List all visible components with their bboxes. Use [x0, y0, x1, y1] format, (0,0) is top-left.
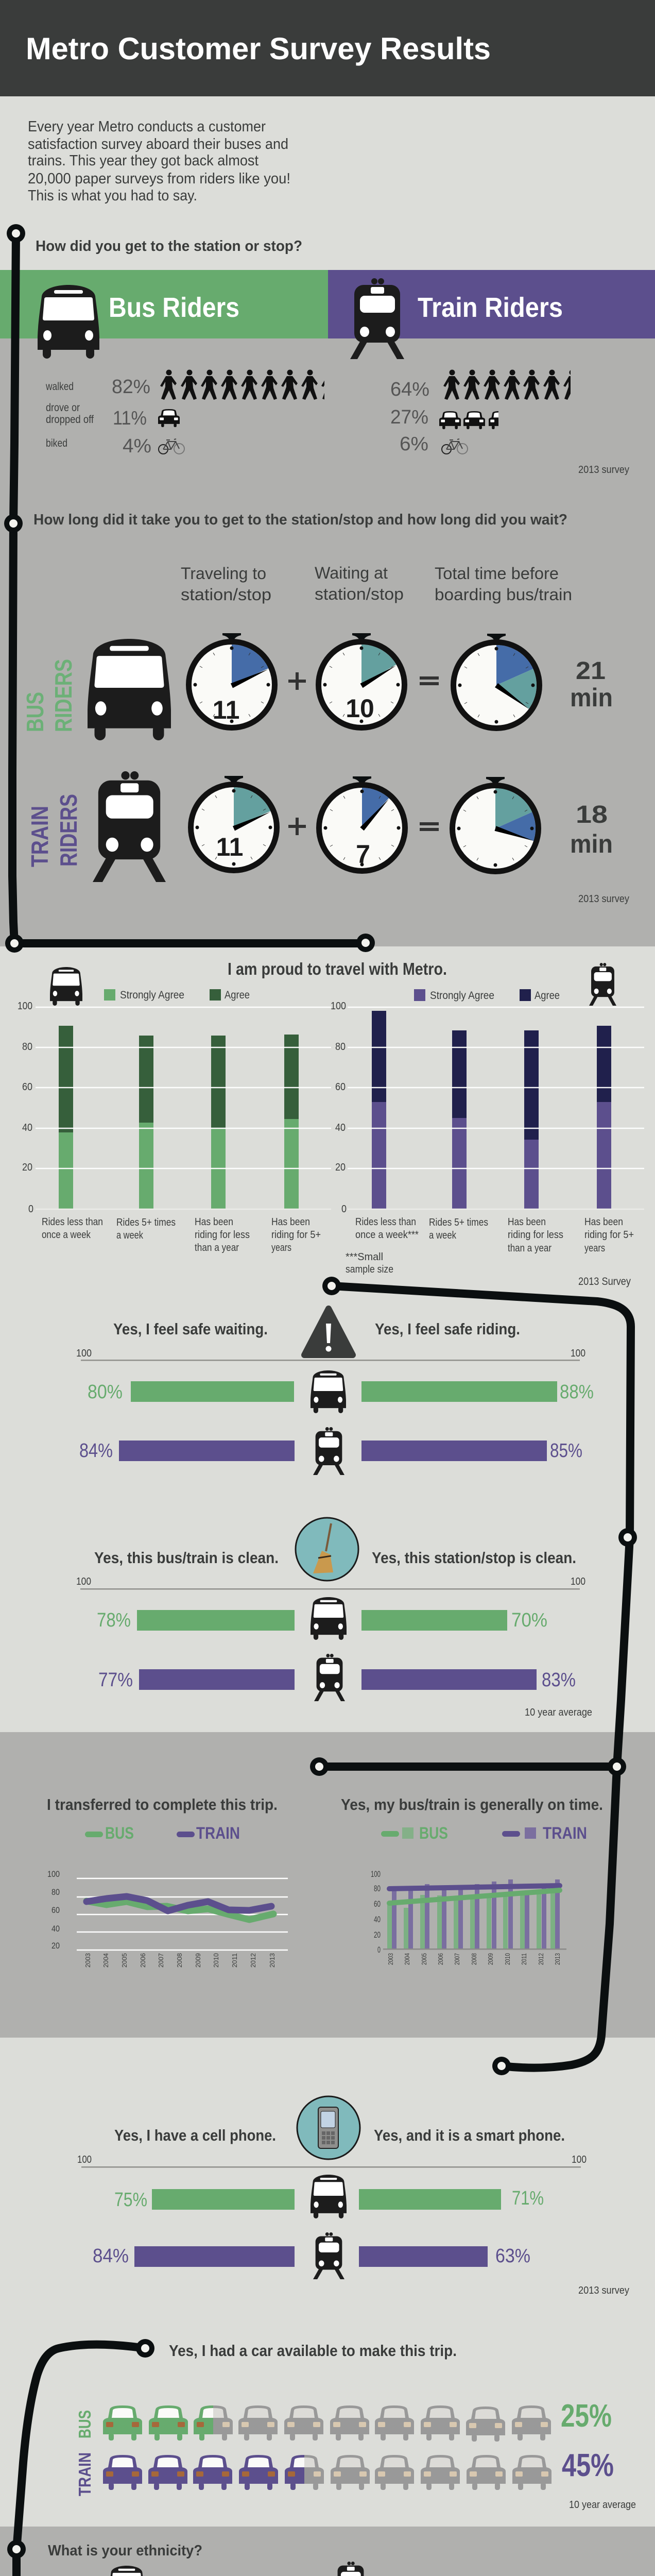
stopwatch: bus total — [453, 634, 540, 728]
train riders rotated label: TRAIN — [26, 806, 53, 867]
panel: train riders band — [328, 270, 655, 359]
icon: bus — [38, 285, 99, 359]
column headers: Total time before — [435, 564, 559, 583]
category labels: train: years — [584, 1243, 605, 1254]
legend: train: Agree — [535, 990, 560, 1002]
train bars: 85% — [550, 1440, 582, 1462]
panel: transfers and on time — [0, 1732, 655, 2038]
column headers — [181, 564, 572, 604]
panel: feel safe — [76, 1309, 594, 1475]
train bars: 84% — [93, 2245, 129, 2267]
legend: bus — [104, 989, 250, 1001]
metro line: top segment — [4, 224, 375, 953]
line chart: transfers: 2006 — [139, 1953, 147, 1968]
combo chart: on time: 2004 — [403, 1953, 411, 1965]
combo chart: on time — [371, 1869, 566, 1965]
stat: bus 25 percent: 25% — [561, 2398, 612, 2434]
category labels: bus: than a year — [195, 1242, 239, 1253]
row labels: mode of access: biked — [46, 437, 67, 449]
train bars — [79, 1440, 582, 1462]
title: Metro Customer Survey Results — [26, 31, 491, 66]
axis labels: 0 — [341, 1204, 347, 1215]
stopwatch: train traveling 11: 11 — [216, 833, 243, 861]
category labels: bus: years — [271, 1242, 291, 1253]
icon: bus — [311, 1597, 347, 1640]
combo chart: on time: 2003 — [387, 1953, 394, 1965]
heading: safe waiting: Yes, I feel safe waiting. — [113, 1320, 268, 1338]
icon: train — [313, 2232, 344, 2279]
category labels: train: once a week*** — [355, 1229, 419, 1241]
bus bars: 88% — [560, 1381, 594, 1403]
column headers: boarding bus/train — [435, 585, 572, 604]
category labels: train: sample size — [346, 1264, 393, 1275]
axis labels: 0 — [28, 1204, 33, 1215]
heading: ethnicity: What is your ethnicity? — [48, 2543, 202, 2559]
stopwatch: bus traveling 11 — [188, 633, 275, 727]
combo chart: on time: 20 — [374, 1930, 381, 1940]
source note: 2013 survey — [578, 464, 629, 476]
icon: warning triangle — [304, 1309, 353, 1355]
intro text: satisfaction survey aboard their buses and — [28, 136, 288, 152]
bus riders rotated label: RIDERS — [50, 659, 77, 732]
stopwatch: train total — [452, 777, 539, 872]
car pictogram: bus 25 percent — [103, 2405, 551, 2442]
heading: proud to travel: I am proud to travel with Metro. — [228, 959, 447, 978]
stopwatch: bus traveling 11: 11 — [213, 696, 239, 724]
legend: bus: Strongly Agree — [120, 989, 184, 1001]
category labels: train: ***Small — [346, 1251, 383, 1263]
column headers: station/stop — [315, 585, 404, 603]
bus bars: 80% — [88, 1381, 123, 1403]
panel: car available — [75, 2342, 636, 2511]
heading: bus clean: Yes, this bus/train is clean. — [94, 1549, 279, 1567]
plus sign — [288, 818, 306, 835]
total train minutes: 18 — [576, 801, 608, 828]
label: train: TRAIN — [75, 2452, 94, 2496]
axis labels: 80 — [22, 1041, 32, 1053]
total bus minutes: min — [570, 683, 613, 712]
bus access stats: 82% — [112, 376, 150, 398]
category labels: bus: Has been — [271, 1216, 310, 1228]
category labels: bus — [42, 1216, 321, 1253]
line chart: transfers: 2005 — [120, 1953, 128, 1968]
total train minutes: min — [570, 829, 613, 858]
metro line: middle segment — [310, 1277, 637, 2075]
heading: how long did it take: How long did it take you to get to the station/stop and how long did you wait? — [33, 512, 567, 528]
label: bus: BUS — [75, 2410, 94, 2438]
icon: train — [589, 963, 616, 1006]
category labels: train: than a year — [508, 1243, 551, 1254]
icon: broom — [296, 1518, 358, 1581]
legend: on time: TRAIN — [543, 1824, 587, 1842]
icon: bus large — [88, 639, 171, 740]
panel: cell phone: 100 — [572, 2154, 587, 2165]
axis labels: 40 — [22, 1122, 32, 1133]
axis labels: 40 — [335, 1122, 346, 1133]
line chart: transfers: 2008 — [176, 1953, 183, 1968]
combo chart: on time: 2007 — [453, 1953, 461, 1965]
icon: phone — [297, 2096, 360, 2159]
train riders heading: Train Riders — [418, 292, 563, 323]
bus bars — [88, 1381, 594, 1403]
panel: feel safe: 100 — [571, 1348, 585, 1359]
icon: train — [350, 278, 404, 359]
total bus minutes: 21 — [576, 657, 606, 685]
combo chart: on time: 2012 — [537, 1953, 545, 1965]
axis labels: 60 — [335, 1081, 346, 1093]
metro line: lower segment — [7, 2339, 334, 2576]
stopwatch: train waiting 7 — [319, 776, 405, 871]
column headers: Waiting at — [315, 564, 388, 582]
legend: transfer: BUS — [105, 1824, 134, 1842]
category labels: bus: once a week — [42, 1229, 91, 1241]
panel: gray travel section — [0, 338, 655, 946]
combo chart: on time: 60 — [374, 1899, 381, 1909]
heading: car available: Yes, I had a car available to make this trip. — [169, 2342, 457, 2360]
source note: 2013 survey — [578, 893, 629, 905]
intro text: This is what you had to say. — [28, 188, 197, 204]
total bus minutes — [570, 657, 613, 712]
train access stats: 27% — [390, 406, 428, 428]
bus riders rotated label — [22, 659, 77, 732]
stopwatch: train waiting 7: 7 — [356, 840, 370, 869]
train access stats: 64% — [390, 379, 429, 400]
panel: proud bar chart — [18, 963, 644, 1275]
panel: header — [0, 0, 655, 96]
row labels: mode of access: walked — [45, 381, 74, 393]
category labels: train — [346, 1216, 634, 1275]
panel: cell phone: 100 — [77, 2154, 92, 2165]
icon: bus — [109, 2566, 145, 2576]
stopwatch: train traveling 11 — [191, 776, 277, 871]
category labels: train: a week — [429, 1230, 457, 1241]
icon: bus — [50, 967, 82, 1006]
panel: feel safe: 100 — [76, 1348, 92, 1359]
bus bars — [114, 2188, 544, 2211]
category labels: bus: riding for 5+ — [271, 1229, 321, 1241]
train bars: 63% — [495, 2245, 530, 2267]
line chart: transfers: 2009 — [194, 1953, 202, 1968]
category labels: train: Has been — [508, 1216, 546, 1228]
combo chart: on time: 40 — [374, 1914, 381, 1924]
train bars: 77% — [98, 1669, 133, 1691]
stopwatch: bus waiting 10 — [318, 633, 405, 727]
column headers: station/stop — [181, 585, 271, 604]
bus riders heading: Bus Riders — [109, 292, 239, 323]
axis labels: 20 — [335, 1162, 346, 1173]
combo chart: on time: 2005 — [420, 1953, 428, 1965]
axis labels — [18, 1001, 347, 1215]
heading: cell phone: Yes, I have a cell phone. — [114, 2126, 276, 2144]
source note: 2013 Survey — [578, 1276, 631, 1287]
car pictogram: train 45 percent — [103, 2455, 551, 2490]
heading: how did you get to the station: How did you get to the station or stop? — [36, 238, 302, 255]
icon: train — [335, 2562, 366, 2576]
train riders rotated label — [26, 794, 82, 867]
axis labels: 100 — [18, 1001, 32, 1012]
category labels: bus: riding for less — [195, 1229, 250, 1241]
train bars: 84% — [79, 1440, 113, 1462]
equals sign — [420, 678, 439, 684]
plus sign — [288, 672, 306, 690]
line chart: transfers: 2003 — [84, 1953, 92, 1968]
axis labels: 100 — [331, 1001, 346, 1012]
row labels: mode of access: drove or — [46, 402, 80, 414]
category labels: bus: a week — [116, 1230, 144, 1241]
bars: bus — [59, 1026, 299, 1209]
intro text: trains. This year they got back almost — [28, 152, 258, 169]
panel: clean: 100 — [76, 1576, 91, 1587]
icon: bus — [311, 1370, 346, 1413]
category labels: train: riding for 5+ — [584, 1229, 634, 1241]
line chart: transfers: 80 — [51, 1887, 60, 1897]
train riders rotated label: RIDERS — [55, 794, 82, 867]
bus bars: 78% — [97, 1609, 131, 1631]
stopwatch: bus waiting 10: 10 — [346, 694, 374, 723]
category labels: train: Rides 5+ times — [429, 1217, 488, 1228]
bus access stats: 11% — [113, 408, 147, 429]
combo chart: on time: 2008 — [470, 1953, 478, 1965]
line chart: transfers: 20 — [51, 1941, 60, 1951]
line chart: transfers: 2010 — [212, 1953, 220, 1968]
line chart: transfers: 100 — [47, 1869, 60, 1879]
heading: on time: Yes, my bus/train is generally on time. — [341, 1795, 603, 1814]
line chart: transfers: 40 — [51, 1924, 60, 1934]
bus bars: 75% — [114, 2189, 147, 2211]
category labels: bus: Rides 5+ times — [116, 1217, 176, 1228]
combo chart: on time: 100 — [371, 1869, 381, 1879]
legend: on time — [381, 1824, 587, 1842]
row labels: mode of access: dropped off — [46, 414, 94, 426]
intro text: 20,000 paper surveys from riders like you! — [28, 171, 290, 187]
line chart: transfers: 2011 — [231, 1953, 238, 1968]
category labels: bus: Has been — [195, 1216, 233, 1228]
combo chart: on time: 2010 — [504, 1953, 511, 1965]
train bars — [93, 2245, 530, 2267]
panel: cell phone — [77, 2096, 587, 2279]
panel: bus riders band — [0, 270, 328, 359]
source note: 10 year average — [569, 2499, 636, 2511]
train access stats — [390, 370, 580, 455]
train bars: 83% — [542, 1669, 576, 1691]
category labels: train: Rides less than — [355, 1216, 416, 1228]
combo chart: on time: 2011 — [520, 1953, 528, 1965]
intro text — [28, 118, 290, 204]
axis labels: 20 — [22, 1162, 32, 1173]
bus access stats: 4% — [123, 435, 151, 457]
bus access stats — [112, 370, 338, 457]
legend: transfer — [85, 1824, 240, 1842]
panel: ethnicity and gender — [0, 2527, 655, 2576]
combo chart: on time: 2006 — [437, 1953, 444, 1965]
legend: train: Strongly Agree — [430, 990, 494, 1002]
combo chart: on time: 0 — [377, 1945, 381, 1955]
column headers: Traveling to — [181, 564, 266, 583]
line chart: transfers: 60 — [51, 1905, 60, 1915]
intro text: Every year Metro conducts a customer — [28, 118, 266, 135]
category labels: train: Has been — [584, 1216, 623, 1228]
train access stats: 6% — [400, 433, 428, 455]
row labels: mode of access — [45, 381, 94, 449]
legend: on time: BUS — [419, 1824, 448, 1842]
bus riders rotated label: BUS — [22, 692, 48, 732]
line chart: transfers: 2007 — [157, 1953, 165, 1968]
icon: train — [314, 1654, 345, 1701]
icon: bus — [311, 2175, 347, 2218]
axis labels: 60 — [22, 1081, 32, 1093]
bus bars: 71% — [512, 2188, 544, 2209]
panel: clean — [76, 1518, 585, 1701]
combo chart: on time: 2013 — [554, 1953, 561, 1965]
stat: train 45 percent: 45% — [562, 2448, 614, 2483]
category labels: bus: Rides less than — [42, 1216, 103, 1228]
heading: station clean: Yes, this station/stop is clean. — [372, 1549, 576, 1567]
legend: transfer: TRAIN — [196, 1824, 240, 1842]
bus bars: 70% — [511, 1609, 547, 1631]
legend: bus: Agree — [225, 989, 250, 1001]
icon: train large — [93, 771, 166, 882]
panel: clean: 100 — [571, 1576, 585, 1587]
line chart: transfers: 2004 — [102, 1953, 110, 1968]
icon: train — [313, 1427, 344, 1475]
train bars — [98, 1669, 576, 1691]
axis labels: 80 — [335, 1041, 346, 1053]
heading: safe riding: Yes, I feel safe riding. — [375, 1320, 520, 1338]
line chart: transfers: 2012 — [249, 1953, 257, 1968]
combo chart: on time: 80 — [374, 1884, 381, 1893]
equals sign — [420, 824, 439, 829]
heading: transferred: I transferred to complete this trip. — [47, 1795, 278, 1814]
bars: train — [372, 1011, 611, 1209]
source note: 2013 survey — [578, 2285, 629, 2296]
bus bars — [97, 1609, 547, 1631]
category labels: train: riding for less — [508, 1229, 563, 1241]
heading: smart phone: Yes, and it is a smart phone. — [374, 2126, 565, 2144]
legend: train — [414, 989, 560, 1002]
total train minutes — [570, 801, 613, 858]
line chart: transfers: 2013 — [268, 1953, 276, 1968]
combo chart: on time: 2009 — [487, 1953, 494, 1965]
source note: 10 year average — [525, 1707, 592, 1718]
line chart: transfers — [47, 1869, 288, 1968]
